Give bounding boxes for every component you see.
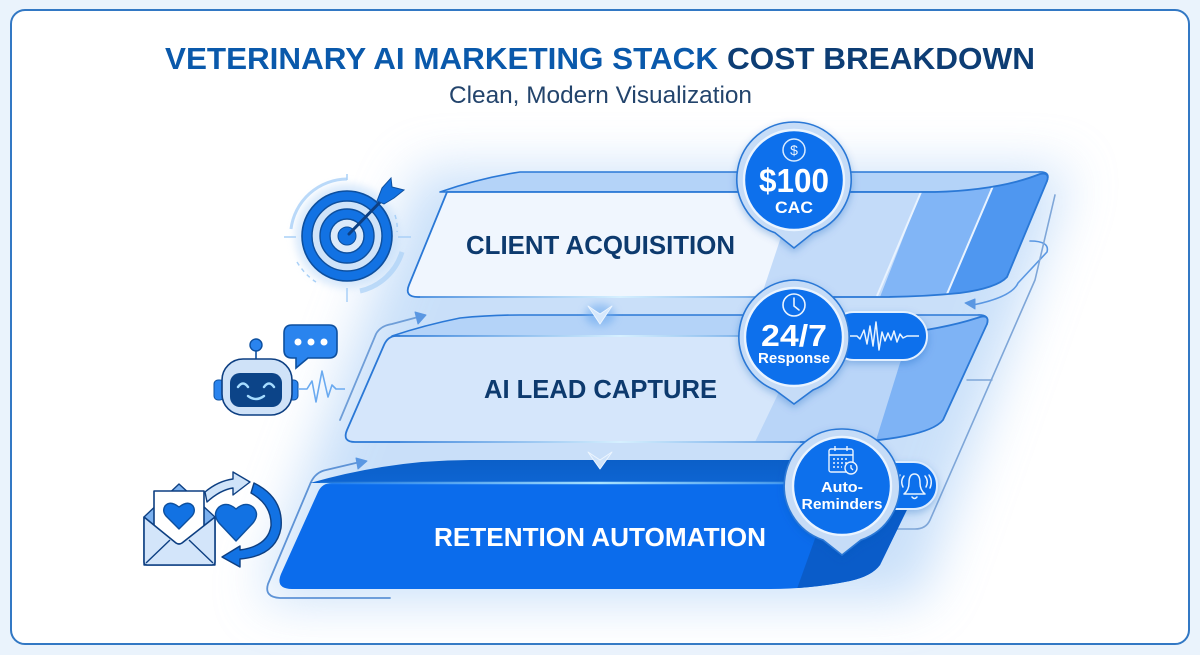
background glow xyxy=(260,170,1070,600)
badge: Auto-Reminders: Auto- xyxy=(821,480,863,496)
letter xyxy=(154,491,204,545)
title xyxy=(165,41,1035,76)
retention front face xyxy=(279,482,907,589)
acquisition front face xyxy=(408,165,1060,300)
panel: retention automation xyxy=(279,460,907,589)
antenna xyxy=(250,339,262,360)
badge: $100 CAC: CAC xyxy=(775,198,813,217)
lead capture front face xyxy=(344,316,988,443)
acquisition label: CLIENT ACQUISITION xyxy=(466,232,735,260)
badge: 24/7 Response: Response xyxy=(758,351,830,367)
badge: 24/7 Response xyxy=(739,280,927,404)
lead capture label: AI LEAD CAPTURE xyxy=(484,376,717,404)
retention label: RETENTION AUTOMATION xyxy=(434,524,766,552)
pill: pulse wave xyxy=(830,312,927,360)
pill: bell xyxy=(860,462,937,509)
icon: dollar coin: $ xyxy=(790,142,798,158)
title: VETERINARY AI MARKETING STACK xyxy=(165,41,719,76)
icon: calendar clock xyxy=(829,446,857,474)
panel: client acquisition xyxy=(408,165,1060,300)
icon: target with arrow xyxy=(284,174,411,302)
icon: robot with speech bubble xyxy=(214,325,345,415)
badge: Auto-Reminders xyxy=(784,429,937,555)
badge: Auto-Reminders: Reminders xyxy=(802,497,882,513)
bottom cycle arrow xyxy=(222,483,281,567)
subtitle: Clean, Modern Visualization xyxy=(449,82,752,109)
badge: $100 CAC: $100 xyxy=(759,162,829,199)
envelope back xyxy=(144,484,215,565)
connector outlines behind panels xyxy=(267,195,1055,598)
speech bubble xyxy=(284,325,337,368)
chevron arrow: lead capture to retention xyxy=(588,452,612,469)
retention top face xyxy=(310,460,910,500)
acquisition top face xyxy=(440,172,1048,192)
title: COST BREAKDOWN xyxy=(727,41,1035,76)
icon: clock xyxy=(783,294,805,316)
top cycle arrow xyxy=(205,472,250,502)
panel: AI lead capture xyxy=(344,314,988,443)
icon: envelope with hearts and cycle arrows xyxy=(144,472,281,567)
badge: 24/7 Response: 24/7 xyxy=(761,318,827,353)
chevron arrow: acquisition to lead capture xyxy=(585,304,615,326)
lead capture top face xyxy=(392,315,988,336)
badge: $100 CAC xyxy=(737,122,851,248)
envelope front xyxy=(144,517,215,565)
heart xyxy=(216,504,256,541)
